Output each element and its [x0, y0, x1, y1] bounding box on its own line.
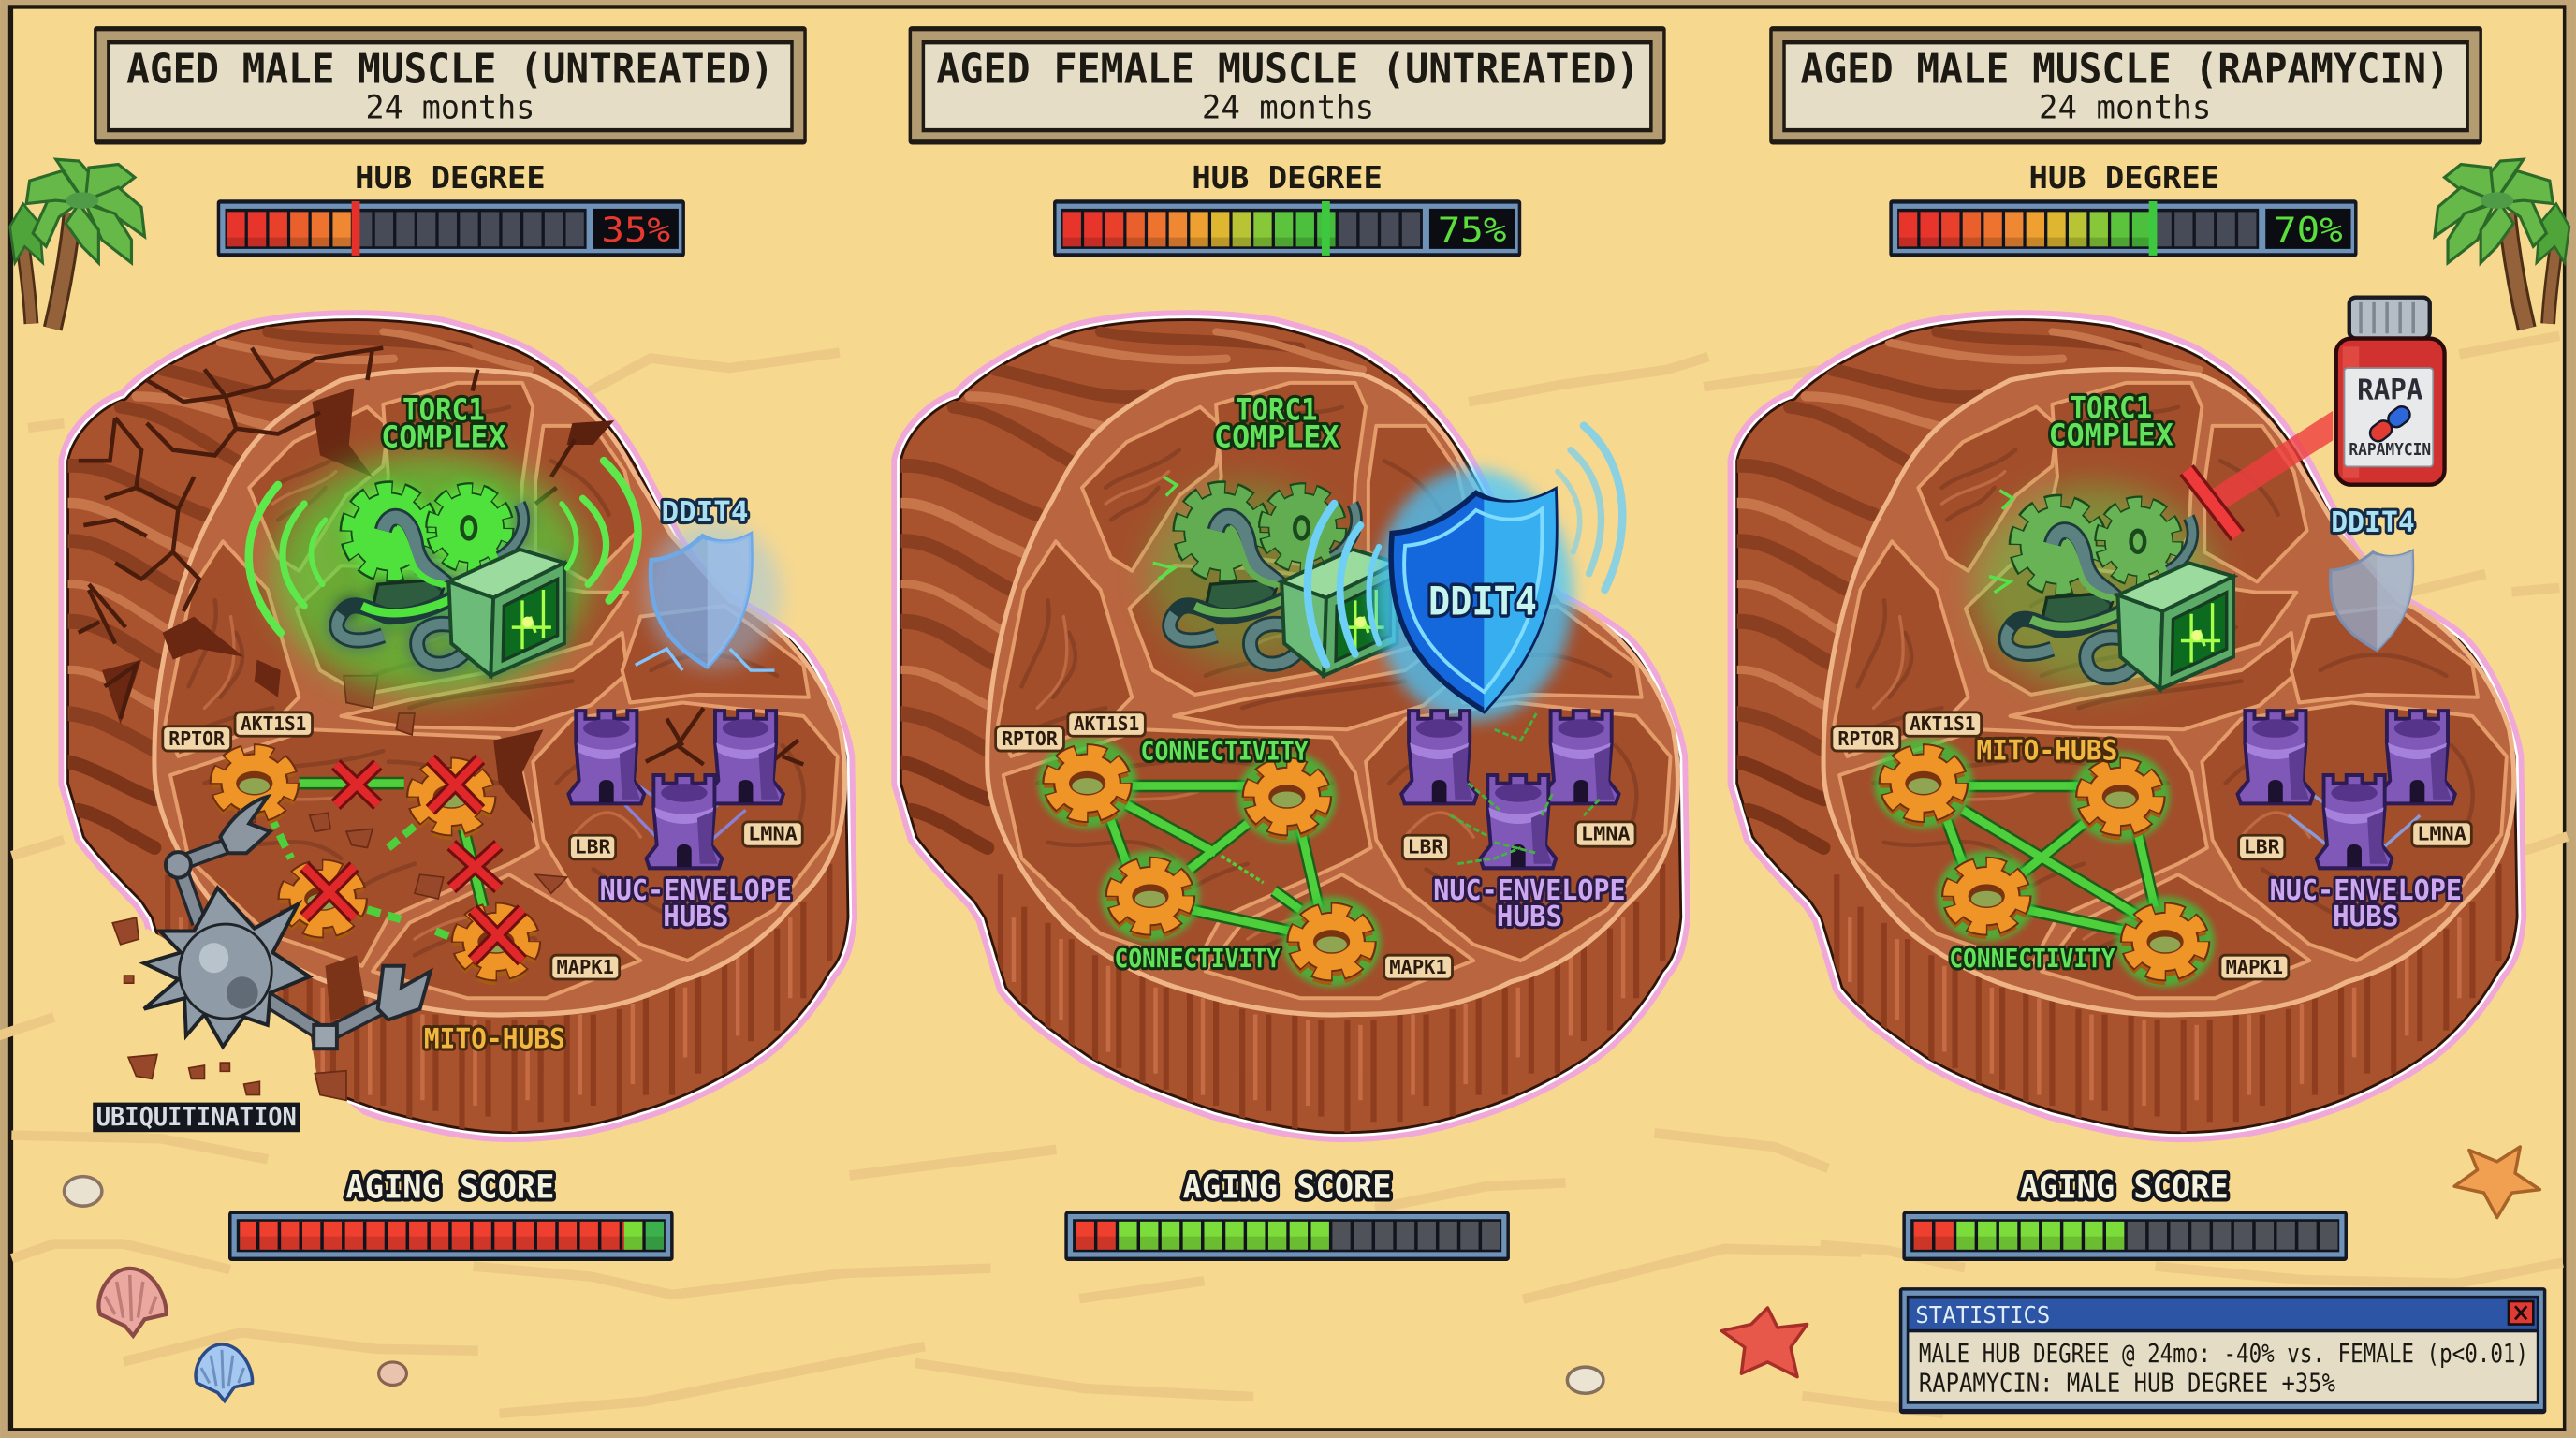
aging score bar: low [1064, 1167, 1510, 1261]
label: nuc-envelope hubs: NUC-ENVELOPE [1433, 874, 1626, 907]
red failure crosses [304, 759, 522, 961]
hub degree gauge: 75% [1053, 159, 1521, 257]
label: DDIT4 on shield: DDIT4 [1428, 578, 1537, 624]
muscle cross-section: healthy, DDIT4 active [896, 320, 1681, 1133]
hub degree gauge: 70%: HUB DEGREE [2029, 159, 2219, 196]
hub degree gauge: 35%: 35% [601, 210, 670, 250]
label: TORC1 complex [2049, 392, 2174, 453]
label: ubiquitination: UBIQUITINATION [96, 1103, 297, 1132]
gene name tags [163, 712, 802, 979]
cracks and damage [79, 348, 803, 824]
pebble: white left [65, 1177, 102, 1206]
gene name tags: AKT1S1 [1910, 712, 1975, 735]
debris rocks [112, 676, 567, 1100]
hub degree gauge: 35%: HUB DEGREE [355, 159, 546, 196]
label: nuc-envelope hubs: NUC-ENVELOPE [2270, 874, 2462, 907]
label: connectivity upper: CONNECTIVITY [1141, 738, 1309, 767]
gene name tags: MAPK1 [1389, 956, 1447, 978]
label: connectivity: CONNECTIVITY [1949, 945, 2115, 974]
TORC1 machine inhibited [1973, 485, 2233, 689]
label: TORC1 complex: TORC1 [402, 393, 485, 427]
label: mito-hubs: MITO-HUBS [1976, 735, 2117, 767]
starfish: red [1721, 1308, 1808, 1377]
gene name tags: LMNA [748, 823, 798, 845]
DDIT4 shield faded [2331, 550, 2413, 650]
label: nuc-envelope hubs [2270, 874, 2462, 933]
label: TORC1 complex: TORC1 [2070, 392, 2152, 426]
heading: aged male untreated [94, 26, 807, 144]
heading: aged male rapamycin: AGED MALE MUSCLE (RAPAMYCIN) [1801, 46, 2450, 94]
label: nuc-envelope hubs: NUC-ENVELOPE [600, 874, 792, 907]
palm tree: left [10, 159, 145, 329]
label: nuc-envelope hubs [1433, 874, 1626, 933]
pebble: pink [379, 1362, 406, 1385]
blue suppression waves [1308, 426, 1622, 665]
aging score bar: high: AGING SCORE [345, 1167, 554, 1206]
DDIT4 shield active [1391, 491, 1556, 711]
gene name tags [996, 712, 1635, 979]
panel: aged female muscle untreated [896, 26, 1681, 1261]
gene name tags: LMNA [1581, 823, 1631, 845]
label: TORC1 complex: TORC1 [1236, 393, 1318, 427]
label: nuc-envelope hubs [600, 874, 792, 933]
panel: aged male muscle rapamycin [1732, 26, 2517, 1261]
panel: statistics window [1899, 1287, 2546, 1414]
hub degree gauge: 75%: HUB DEGREE [1192, 159, 1383, 196]
gene name tags: LMNA [2417, 823, 2466, 845]
pebble: white centre [1567, 1367, 1603, 1393]
gene name tags: AKT1S1 [241, 712, 306, 735]
panel: aged male muscle untreated [63, 26, 848, 1261]
mito-hub network fully connected [1874, 738, 2215, 987]
nuclear-envelope towers [2238, 711, 2455, 868]
label: TORC1 complex [381, 393, 506, 454]
muscle cross-section: rapamycin restored [1732, 320, 2517, 1133]
hub degree gauge: 70%: 70% [2274, 210, 2343, 250]
aging score bar: low: AGING SCORE [2020, 1167, 2229, 1206]
hub degree gauge: 75%: 75% [1438, 210, 1506, 250]
shell: pink scallop [98, 1269, 166, 1336]
gene name tags: AKT1S1 [1074, 712, 1139, 735]
heading: aged male untreated: 24 months [366, 88, 534, 126]
heading: aged male untreated: AGED MALE MUSCLE (UNTREATED) [126, 46, 774, 94]
starfish: orange [2454, 1147, 2539, 1217]
gene name tags: RPTOR [168, 727, 226, 750]
label: mito-hubs: MITO-HUBS [424, 1023, 565, 1055]
label: TORC1 complex: COMPLEX [2049, 419, 2174, 453]
close button [2509, 1301, 2533, 1325]
label: TORC1 complex: COMPLEX [1214, 420, 1339, 454]
aging score bar: low [1902, 1167, 2348, 1261]
arrow: rapamycin inhibition T-bar [2187, 411, 2333, 536]
label: connectivity lower: CONNECTIVITY [1114, 945, 1281, 974]
palm tree: right [2435, 159, 2569, 329]
label: TORC1 complex [1214, 393, 1339, 454]
icon: capsule [2367, 404, 2413, 445]
gene name tags [1832, 712, 2471, 979]
shell: blue scallop [196, 1344, 253, 1401]
sand-bitten corner [125, 929, 383, 1130]
gene name tags: RPTOR [1837, 727, 1895, 750]
gene name tags: MAPK1 [556, 956, 614, 978]
TORC1 machine overactive [249, 453, 638, 695]
hub degree gauge: 70% [1889, 159, 2358, 257]
heading: aged female untreated: AGED FEMALE MUSCLE (UNTREATED) [936, 46, 1640, 94]
text: RAPAMYCIN: RAPAMYCIN [2349, 441, 2431, 460]
nuclear-envelope tower hubs [568, 711, 783, 868]
label: DDIT4: DDIT4 [661, 496, 748, 529]
muscle cross-section: degraded [63, 320, 848, 1133]
label: nuc-envelope hubs: HUBS [663, 901, 728, 933]
DDIT4 shield glow [1373, 469, 1573, 722]
TORC1 machine suppressed [1148, 477, 1398, 676]
hub degree gauge: 35% [217, 159, 685, 257]
label: nuc-envelope hubs: HUBS [1497, 901, 1562, 933]
statistics line 2: RAPAMYCIN: MALE HUB DEGREE +35% [1919, 1370, 2335, 1399]
broken mito-hub network [217, 751, 533, 979]
gene name tags: RPTOR [1002, 727, 1059, 750]
heading: aged male rapamycin: 24 months [2039, 88, 2211, 126]
label: nuc-envelope hubs: HUBS [2333, 901, 2398, 933]
label: DDIT4: DDIT4 [2331, 506, 2415, 539]
ubiquitination flail [144, 797, 431, 1049]
icon: rapamycin bottle [2336, 298, 2445, 485]
gene name tags: LBR [1408, 836, 1444, 858]
heading: aged male rapamycin [1769, 26, 2482, 144]
gene name tags: LBR [575, 836, 611, 858]
text: RAPA: RAPA [2357, 374, 2422, 406]
gene name tags: LBR [2244, 836, 2280, 858]
nuclear-envelope towers with vines [1401, 711, 1619, 868]
DDIT4 shield faded [647, 520, 781, 668]
gene name tags: MAPK1 [2226, 956, 2283, 978]
aging score bar: high [228, 1167, 674, 1261]
mito-hub network connected [1038, 738, 1381, 987]
label: TORC1 complex: COMPLEX [381, 420, 506, 454]
aging score bar: low: AGING SCORE [1183, 1167, 1392, 1206]
window title: STATISTICS [1915, 1301, 2050, 1328]
heading: aged female untreated: 24 months [1202, 88, 1374, 126]
heading: aged female untreated [909, 26, 1666, 144]
